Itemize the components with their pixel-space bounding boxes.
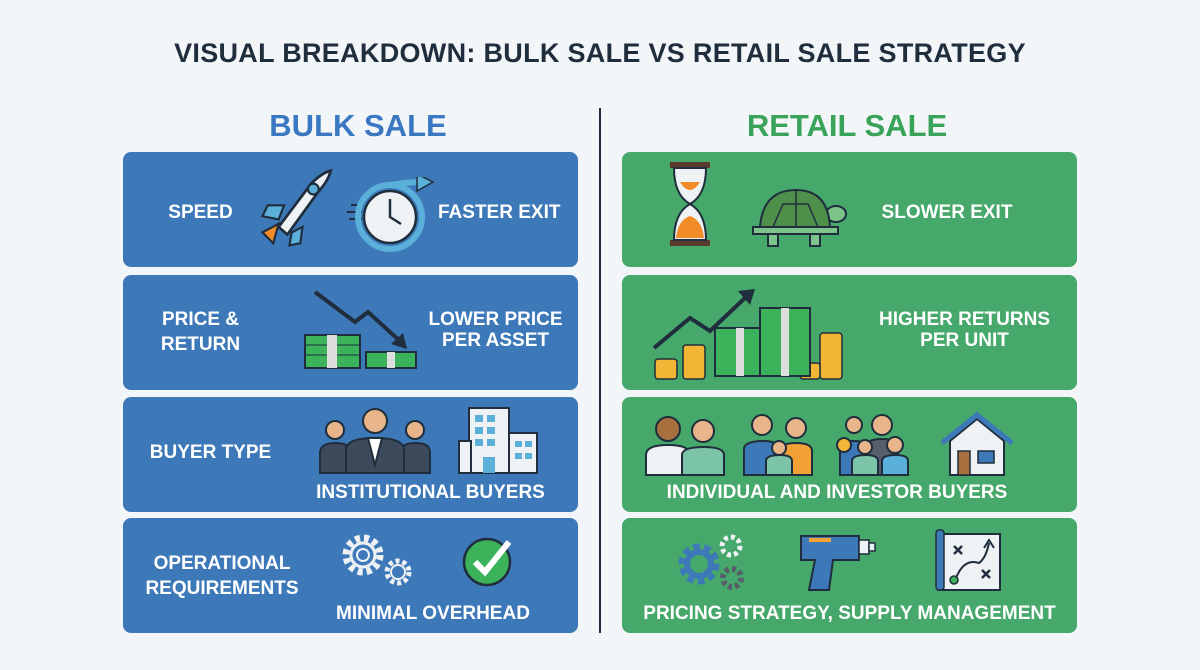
- icon: individual buyers: [645, 416, 725, 476]
- label: lower price per asset: [428, 309, 563, 351]
- icon: rocket: [260, 168, 332, 247]
- label: lower price per asset: PER ASSET: [442, 330, 549, 351]
- panel: bulk speed: [123, 152, 578, 267]
- icon: down arrow and cash: [304, 290, 417, 369]
- label: higher returns per unit: PER UNIT: [920, 330, 1009, 351]
- icon: gears: [342, 534, 412, 586]
- label: higher returns per unit: [879, 309, 1050, 351]
- label: individual and investor buyers: INDIVIDUAL AND INVESTOR BUYERS: [667, 482, 1007, 503]
- label: price & return: RETURN: [161, 334, 240, 355]
- label: buyer type: BUYER TYPE: [150, 442, 271, 463]
- panel: bulk buyer type: [123, 397, 578, 512]
- label: minimal overhead: MINIMAL OVERHEAD: [336, 603, 530, 624]
- panel: bulk price: [123, 275, 578, 390]
- panel: bulk operational: [123, 518, 578, 633]
- heading: bulk sale: BULK SALE: [269, 108, 447, 143]
- icon: turtle: [752, 189, 847, 247]
- icon: business people: [319, 408, 431, 474]
- panel: retail operational: [622, 518, 1077, 633]
- icon: family: [743, 414, 813, 476]
- icon: check circle: [462, 538, 512, 586]
- label: pricing strategy, supply management: PRICING STRATEGY, SUPPLY MANAGEMENT: [643, 603, 1056, 624]
- label: lower price per asset: LOWER PRICE: [428, 309, 563, 330]
- panel: retail buyer type: [622, 397, 1077, 512]
- label: operational requirements: REQUIREMENTS: [145, 578, 299, 599]
- title: VISUAL BREAKDOWN: BULK SALE VS RETAIL SALE STRATEGY: [174, 38, 1026, 68]
- icon: multigenerational family: [836, 414, 909, 476]
- label: institutional buyers: INSTITUTIONAL BUYERS: [316, 482, 545, 503]
- icon: rising chart, coins and cash stacks: [652, 289, 843, 380]
- icon: house: [940, 412, 1014, 476]
- icon: gears: [678, 534, 744, 590]
- icon: hourglass: [670, 162, 710, 246]
- icon: office building: [458, 407, 538, 474]
- heading: retail sale: RETAIL SALE: [747, 108, 947, 143]
- label: speed: SPEED: [168, 202, 233, 223]
- icon: clock: [347, 177, 434, 252]
- icon: glue gun: [800, 535, 876, 591]
- panel: retail price: [622, 275, 1077, 390]
- icon: strategy map: [935, 529, 1001, 591]
- label: slower exit: SLOWER EXIT: [882, 202, 1012, 223]
- label: operational requirements: OPERATIONAL: [154, 553, 290, 574]
- label: price & return: [161, 309, 240, 355]
- label: price & return: PRICE &: [162, 309, 239, 330]
- panel: retail speed: [622, 152, 1077, 267]
- label: faster exit: FASTER EXIT: [438, 202, 560, 223]
- label: higher returns per unit: HIGHER RETURNS: [879, 309, 1050, 330]
- label: operational requirements: [145, 553, 299, 599]
